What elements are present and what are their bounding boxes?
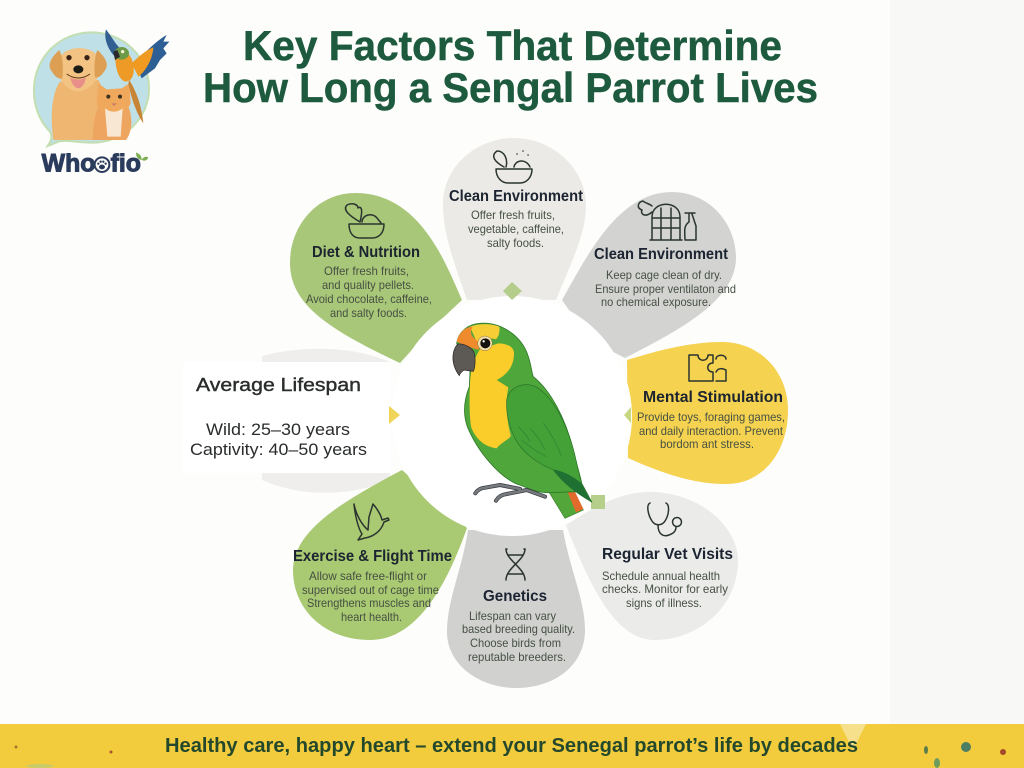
text: regular vet visits: checks. Monitor for early <box>602 583 728 596</box>
panel: clean environment top <box>443 138 586 300</box>
panel: clean environment right <box>562 192 736 358</box>
panel: regular vet visits <box>566 492 738 640</box>
text: diet and nutrition: and salty foods. <box>330 307 407 320</box>
text: exercise and flight time: Exercise & Flight Time <box>293 548 452 565</box>
banner slogan: Healthy care, happy heart – extend your Senegal parrot’s life by decades <box>165 734 858 757</box>
text: average lifespan: Captivity: 40–50 years <box>190 440 367 459</box>
text: exercise and flight time: supervised out of cage time <box>302 584 439 597</box>
text: diet and nutrition <box>306 204 432 320</box>
text: clean environment top: salty foods. <box>487 237 544 250</box>
text: average lifespan: Wild: 25–30 years <box>206 420 350 439</box>
text: mental stimulation: and daily interaction. Prevent <box>639 425 784 438</box>
text: clean environment right: Keep cage clean of dry. <box>606 269 722 282</box>
logo: Whoofio <box>34 29 169 177</box>
panel: genetics <box>447 530 585 688</box>
parrot forehead <box>462 324 499 343</box>
text: clean environment top: vegetable, caffeine, <box>468 223 564 236</box>
parrot wing <box>507 385 592 502</box>
text: mental stimulation: Mental Stimulation <box>643 389 783 406</box>
icon: cat <box>93 83 131 140</box>
text: mental stimulation <box>637 355 785 451</box>
parrot beak <box>453 344 475 376</box>
text: clean environment top: Clean Environment <box>449 188 584 205</box>
icon: leaf <box>136 153 148 161</box>
text: genetics: reputable breeders. <box>468 651 566 664</box>
text: clean environment top: Offer fresh fruits, <box>471 209 555 222</box>
text: regular vet visits <box>602 503 733 610</box>
icon: fresh food bowl <box>494 151 532 183</box>
banner speckles <box>14 724 1006 768</box>
title: Key Factors That Determine <box>243 22 782 69</box>
icon: paw <box>95 157 109 172</box>
panel: exercise and flight time <box>293 470 467 640</box>
title <box>203 22 818 111</box>
title: How Long a Sengal Parrot Lives <box>203 64 818 111</box>
connector markers <box>389 282 631 509</box>
text: clean environment right <box>594 201 736 309</box>
parrot eye <box>478 336 492 351</box>
text: clean environment right: Ensure proper ventilaton and <box>595 283 736 296</box>
parrot chest <box>470 343 514 448</box>
text: diet and nutrition: and quality pellets. <box>322 279 414 292</box>
panel: mental stimulation <box>627 342 788 484</box>
parrot tail <box>547 487 583 518</box>
icon: macaw <box>105 29 169 123</box>
text: average lifespan <box>190 374 367 459</box>
icon: dog <box>50 48 107 140</box>
parrot feet <box>475 485 545 501</box>
text: clean environment top <box>449 151 584 250</box>
text: diet and nutrition: Offer fresh fruits, <box>324 265 409 278</box>
text: regular vet visits: Regular Vet Visits <box>602 546 733 563</box>
text: exercise and flight time: Strengthens muscles and <box>307 597 431 610</box>
text: average lifespan: Average Lifespan <box>196 374 361 395</box>
text: genetics: based breeding quality. <box>462 623 575 636</box>
text: mental stimulation: bordom ant stress. <box>660 438 754 451</box>
text: exercise and flight time <box>293 504 452 624</box>
text: diet and nutrition: Diet & Nutrition <box>312 244 420 261</box>
panel: average lifespan backdrop <box>183 349 390 493</box>
illustration: senegal parrot <box>453 323 592 518</box>
icon: dna helix <box>506 549 525 580</box>
text: regular vet visits: Schedule annual health <box>602 570 720 583</box>
text: genetics: Choose birds from <box>470 637 561 650</box>
text: clean environment right: Clean Environment <box>594 246 729 263</box>
footer banner <box>0 724 1024 768</box>
icon: cage and spray bottle <box>638 201 696 240</box>
text: diet and nutrition: Avoid chocolate, caffeine, <box>306 293 432 306</box>
icon: salad bowl <box>345 204 384 238</box>
panel: central circle <box>392 296 632 536</box>
icon: puzzle pieces <box>689 355 726 381</box>
text: genetics <box>462 549 575 664</box>
text: exercise and flight time: Allow safe free-flight or <box>309 570 427 583</box>
text: mental stimulation: Provide toys, foraging games, <box>637 411 785 424</box>
text: genetics: Lifespan can vary <box>469 610 556 623</box>
text: clean environment right: no chemical exposure. <box>601 296 711 309</box>
icon: speech bubble <box>34 32 149 146</box>
icon: flying dove <box>354 504 389 540</box>
panel: diet and nutrition <box>290 193 462 363</box>
text: regular vet visits: signs of illness. <box>626 597 702 610</box>
text: genetics: Genetics <box>483 588 547 605</box>
wordmark: Whoofio: Whoofio <box>42 150 141 177</box>
text: exercise and flight time: heart health. <box>341 611 402 624</box>
icon: stethoscope <box>648 503 682 536</box>
parrot body <box>457 323 592 502</box>
